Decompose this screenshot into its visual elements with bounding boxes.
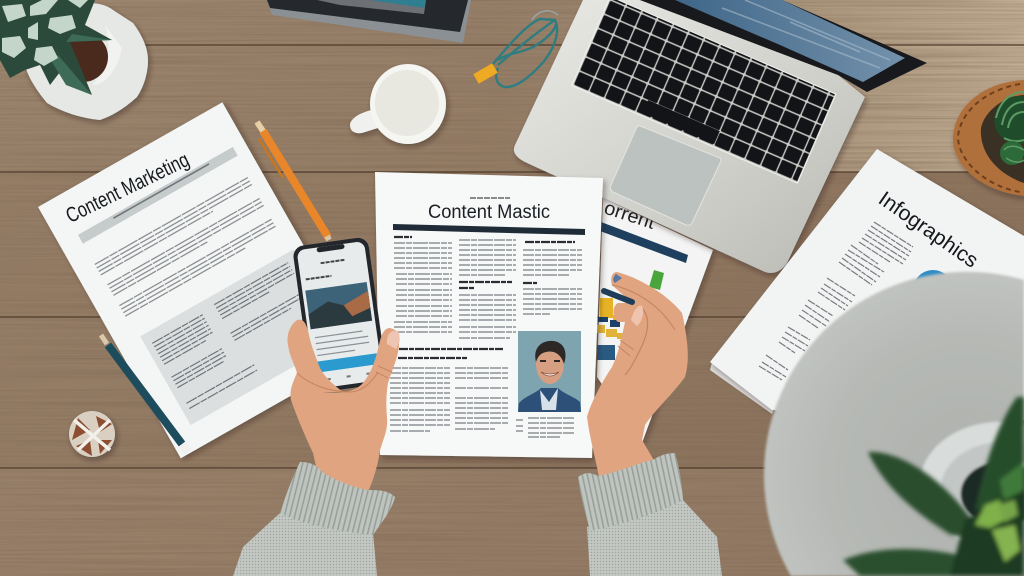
keyboard — [572, 0, 836, 183]
basket plant, right edge — [953, 80, 1024, 196]
blurred fern, bottom right — [843, 397, 1024, 576]
coffee cup — [350, 64, 446, 144]
photo on phone — [305, 282, 372, 329]
ribbed cuff — [280, 462, 395, 535]
dark header bar — [393, 224, 585, 235]
sleeve body — [233, 513, 377, 576]
soil — [981, 95, 1024, 183]
grey info panel — [140, 249, 344, 425]
body text lines — [95, 178, 277, 317]
inner ring — [920, 422, 1024, 548]
large lamp disc — [764, 272, 1024, 576]
orange pencil — [257, 122, 329, 240]
centre paper: Content Mastic — [375, 172, 603, 458]
left sleeve — [233, 462, 395, 576]
fingernail — [613, 274, 622, 283]
ribbed cuff — [578, 453, 683, 531]
stacked books, top — [267, 0, 471, 43]
phone screen — [297, 241, 383, 389]
dark foliage — [0, 0, 112, 95]
small overline — [470, 197, 510, 199]
thumbnail — [387, 331, 399, 349]
teal paper clip and orange clasp — [476, 11, 558, 87]
title: Content Mastic — [428, 202, 550, 223]
white pot — [25, 3, 148, 120]
plant in white pot, top left — [0, 0, 148, 120]
navy pen — [101, 335, 188, 452]
portrait — [518, 331, 581, 412]
partial heading: orrent — [601, 198, 658, 234]
blue chart circle — [913, 270, 953, 310]
grey heading band — [78, 147, 238, 244]
laptop — [514, 0, 927, 273]
article text columns — [390, 240, 582, 437]
left hand holding phone — [287, 320, 400, 492]
screen — [640, 0, 927, 92]
succulent rosettes — [994, 92, 1024, 165]
bold subheads — [394, 237, 575, 358]
navy header bar — [600, 222, 688, 263]
decorative knot ball — [69, 411, 115, 457]
right sleeve — [578, 453, 722, 576]
blue button — [315, 353, 378, 373]
held dark marker — [604, 291, 632, 302]
cup handle — [350, 110, 378, 133]
touchpad — [610, 126, 721, 225]
bar chart fragment — [597, 270, 664, 360]
sleeve body — [587, 500, 722, 576]
right hand — [587, 272, 688, 482]
title: Content Marketing — [62, 148, 193, 228]
left paper: Content Marketing — [38, 102, 365, 458]
laptop body — [514, 0, 865, 273]
pale variegated leaves — [2, 0, 88, 66]
right paper: Infographics — [710, 149, 1024, 420]
behind paper with chart — [597, 198, 713, 443]
title: Infographics — [874, 187, 982, 273]
phone — [292, 236, 388, 394]
list lines — [759, 222, 913, 380]
thumbnail — [631, 306, 643, 326]
woven basket — [953, 80, 1024, 196]
